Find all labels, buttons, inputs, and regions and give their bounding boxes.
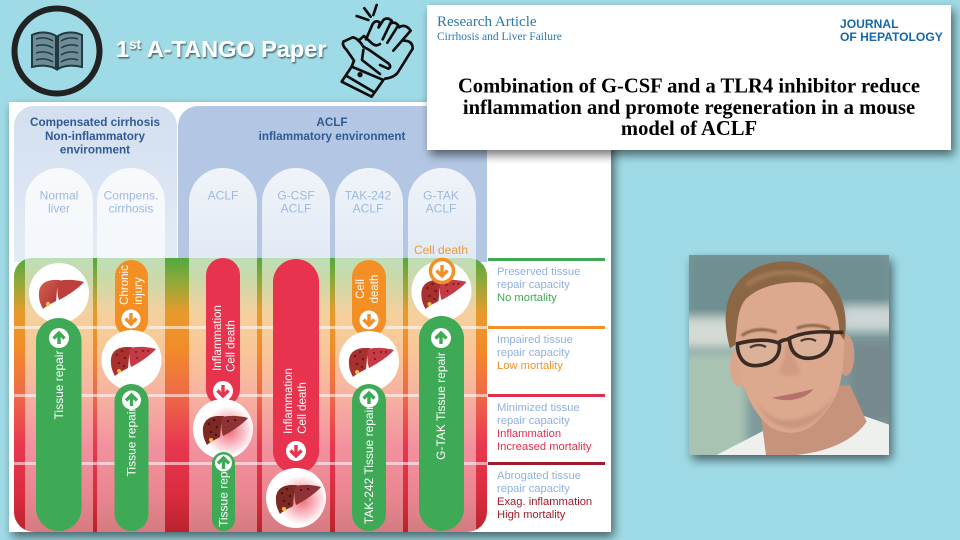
column capsules: [25, 168, 476, 532]
panel: compensated cirrhosis header: [14, 106, 177, 262]
heat gradient field: [14, 258, 487, 532]
panel: figure: [9, 102, 611, 532]
legend: minimized tissue repair capacity: Minimized tissue: [497, 402, 580, 414]
article title: Combination of G-CSF and a TLR4 inhibitor reduce: [458, 76, 920, 98]
column: G-CSF ACLF: Inflammation: [283, 368, 295, 434]
legend: impaired tissue repair capacity: [488, 326, 605, 372]
panel: ACLF header: [178, 106, 487, 262]
heading: compensated cirrhosis: Non-inflammatory: [45, 130, 145, 143]
legend: abrogated tissue repair capacity: repair capacity: [497, 483, 570, 495]
column: TAK-242 ACLF: death: [369, 275, 381, 303]
heading: ACLF: inflammatory environment: [259, 130, 405, 143]
legend: minimized tissue repair capacity: Inflammation: [497, 428, 561, 440]
column label: G-TAK ACLF: G-TAK: [423, 188, 459, 202]
column label: G-CSF ACLF: ACLF: [281, 202, 311, 216]
heading: ACLF: ACLF: [316, 116, 348, 129]
column: G-TAK ACLF: [412, 243, 472, 531]
legend: minimized tissue repair capacity: Increased mortality: [497, 441, 592, 453]
icon: open book in circle: [14, 8, 100, 94]
legend: preserved tissue repair capacity: [488, 258, 605, 304]
article type: Research Article: [437, 14, 537, 30]
figure background: [9, 102, 611, 532]
column label: G-CSF ACLF: G-CSF: [277, 188, 315, 202]
column: compensated cirrhosis: [102, 260, 162, 531]
article section: Cirrhosis and Liver Failure: [437, 31, 562, 43]
column label: Normal liver: Normal: [40, 188, 78, 202]
column label: ACLF: ACLF: [208, 188, 238, 202]
journal logo: OF HEPATOLOGY: [840, 30, 943, 44]
column: ACLF: Cell death: [226, 320, 238, 372]
horizontal gridlines: [14, 326, 487, 465]
journal logo: JOURNAL: [840, 17, 898, 31]
column: TAK-242 ACLF: TAK-242 Tissue repair: [362, 406, 376, 524]
legend: preserved tissue repair capacity: No mortality: [497, 292, 557, 304]
column label: TAK-242 ACLF: ACLF: [353, 202, 383, 216]
legend: abrogated tissue repair capacity: High mortality: [497, 509, 566, 521]
column label: Normal liver: liver: [48, 202, 70, 216]
column: compensated cirrhosis: Chronic: [119, 265, 131, 305]
legend: minimized tissue repair capacity: [488, 394, 605, 453]
column: normal liver: Tissue repair: [52, 351, 66, 419]
heading: compensated cirrhosis: Compensated cirrhosis: [30, 116, 160, 129]
legend: preserved tissue repair capacity: Preserved tissue: [497, 266, 580, 278]
heading: 1st A-TANGO Paper: A-TANGO Paper: [141, 36, 327, 62]
legend: abrogated tissue repair capacity: [488, 462, 605, 521]
heading: 1st A-TANGO Paper: 1: [116, 36, 129, 62]
legend: minimized tissue repair capacity: repair capacity: [497, 415, 570, 427]
legend: abrogated tissue repair capacity: Abrogated tissue: [497, 470, 581, 482]
column label: Compens. cirrhosis: Compens.: [104, 188, 158, 202]
column: G-CSF ACLF: Cell death: [297, 382, 309, 434]
column: compensated cirrhosis: injury: [133, 277, 145, 305]
legend: impaired tissue repair capacity: repair capacity: [497, 347, 570, 359]
portrait photo: [680, 255, 897, 462]
legend: impaired tissue repair capacity: Impaired tissue: [497, 334, 573, 346]
legend: impaired tissue repair capacity: Low mortality: [497, 360, 563, 372]
panel: article title card: [427, 5, 951, 150]
column: normal liver: [29, 263, 89, 531]
column: TAK-242 ACLF: Cell: [355, 279, 367, 299]
column: ACLF: [193, 258, 254, 531]
column label: Compens. cirrhosis: cirrhosis: [109, 202, 153, 216]
column: G-TAK ACLF: Cell death: [414, 243, 468, 257]
column: G-TAK ACLF: G-TAK Tissue repair: [434, 352, 448, 460]
heading: 1st A-TANGO Paper: st: [129, 37, 142, 52]
column: G-CSF ACLF: [266, 259, 327, 528]
article title: inflammation and promote regeneration in a mouse: [463, 97, 915, 119]
column: TAK-242 ACLF: [339, 260, 399, 531]
icon: clapping hands: [342, 5, 413, 97]
column: compensated cirrhosis: Tissue repair: [124, 408, 138, 476]
heading: compensated cirrhosis: environment: [60, 144, 130, 156]
column label: TAK-242 ACLF: TAK-242: [345, 188, 391, 202]
column: ACLF: Inflammation: [212, 305, 224, 371]
article title: model of ACLF: [621, 118, 757, 140]
column label: G-TAK ACLF: ACLF: [426, 202, 456, 216]
legend: preserved tissue repair capacity: repair capacity: [497, 279, 570, 291]
column: ACLF: Tissue rep: [216, 471, 230, 527]
legend: abrogated tissue repair capacity: Exag. inflammation: [497, 496, 592, 508]
